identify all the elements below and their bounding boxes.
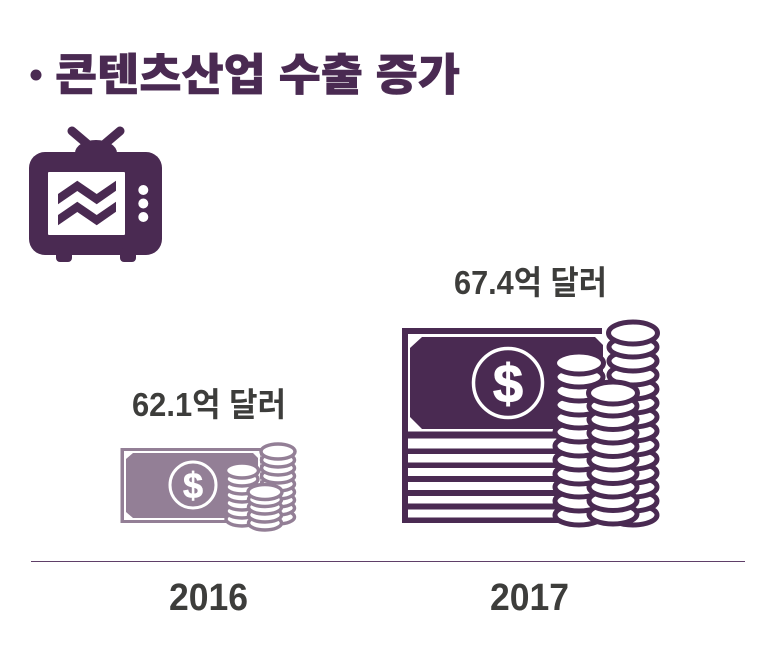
coin stack: back left (226, 463, 258, 526)
banknote: $ (183, 465, 203, 506)
coin stack: front (248, 484, 282, 530)
year label 2017: 2017 (490, 577, 569, 619)
coin stack: front (588, 382, 638, 524)
coin stack: back right (608, 322, 658, 525)
year label 2016: 2016 (169, 577, 248, 619)
bill stack: $ (493, 354, 523, 414)
title: 콘텐츠산업 수출 증가 (55, 51, 460, 100)
icon: small money pile (120, 444, 295, 530)
coin stack: back left (554, 352, 604, 525)
coin stack: back right (261, 444, 295, 524)
bill stack (402, 328, 603, 523)
label: 2017 value: 67.4억 달러 (454, 264, 607, 301)
banknote (120, 448, 260, 523)
icon: large money pile (402, 322, 658, 525)
label: 2016 value: 62.1억 달러 (132, 386, 286, 423)
icon: television (29, 131, 162, 262)
